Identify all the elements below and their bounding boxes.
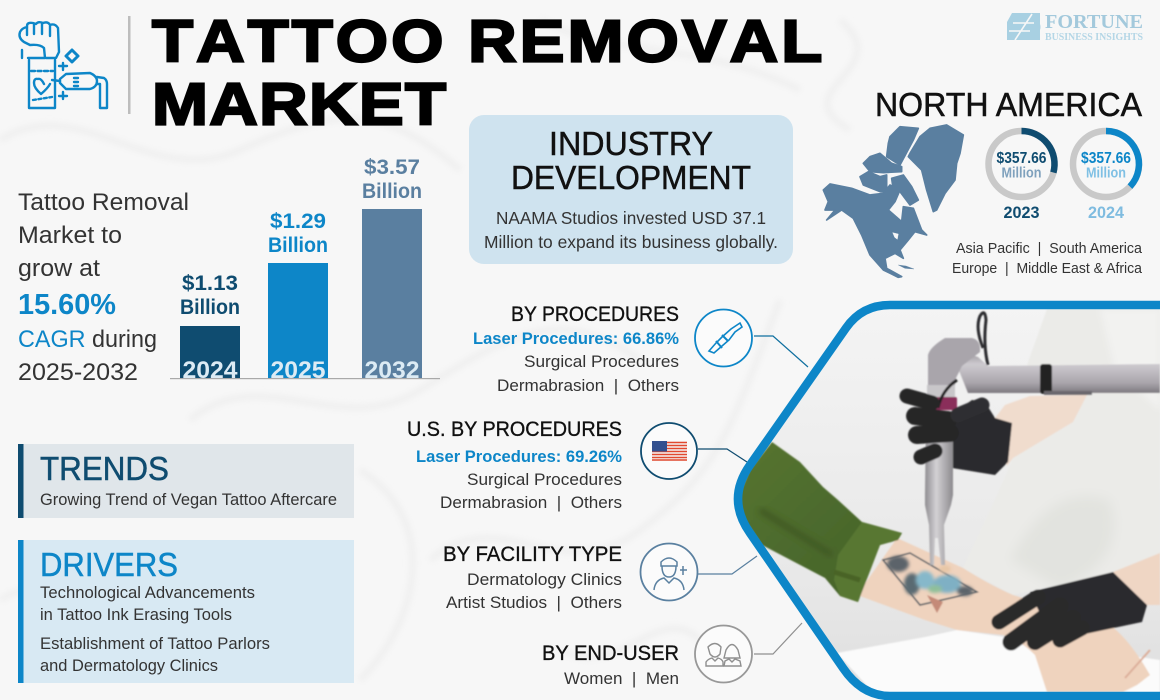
text: other regions xyxy=(952,240,1143,277)
panel: drivers: Establishment of Tattoo Parlors xyxy=(40,635,270,653)
segment: by end-user xyxy=(542,642,679,688)
segment: U.S. by procedures: U.S. BY PROCEDURES xyxy=(407,418,622,441)
segment: U.S. by procedures: Laser Procedures: 69.26% xyxy=(416,447,622,466)
panel: industry development xyxy=(469,115,793,264)
logo: Fortune Business Insights xyxy=(1007,11,1143,43)
bar 2025: $1.29 xyxy=(270,209,326,233)
segment: by procedures: Surgical Procedures xyxy=(524,352,679,371)
segment: by facility type: Dermatology Clinics xyxy=(467,570,622,589)
CAGR text block xyxy=(18,189,189,386)
bar 2032 xyxy=(362,155,422,384)
forearm and hand xyxy=(857,538,1150,692)
panel: drivers: and Dermatology Clinics xyxy=(40,657,218,675)
CAGR text block: 2025-2032 xyxy=(18,359,138,386)
CAGR text block: Market to xyxy=(18,222,122,249)
laser arm xyxy=(927,338,1160,410)
hexagon frame xyxy=(738,305,1160,696)
bar 2024 xyxy=(180,271,240,384)
bar 2032: $3.57 xyxy=(364,155,420,179)
donut: 2024: $357.66 xyxy=(1081,150,1131,167)
logo: Fortune Business Insights: BUSINESS INSIGHTS xyxy=(1045,32,1143,43)
CAGR text block: 15.60% xyxy=(18,289,116,321)
icon: laser handpiece with connector xyxy=(695,310,808,367)
panel: drivers xyxy=(18,540,354,683)
segment: by procedures xyxy=(473,303,679,395)
panel: industry development: INDUSTRY xyxy=(549,125,713,162)
CAGR text block: CAGR during xyxy=(18,326,157,353)
white sheet xyxy=(837,630,1160,700)
panel: trends: Growing Trend of Vegan Tattoo Aftercare xyxy=(40,491,337,509)
heading: North America: NORTH AMERICA xyxy=(875,86,1142,123)
bar 2025: 2025 xyxy=(270,357,326,384)
title: MARKET xyxy=(152,72,446,138)
segment: by end-user: Women | Men xyxy=(564,669,679,688)
lower glove xyxy=(999,572,1147,642)
donut: 2023 xyxy=(988,131,1055,222)
bar 2024: $1.13 xyxy=(182,271,238,295)
donut: 2023: 2023 xyxy=(1004,203,1040,222)
panel: drivers: Technological Advancements xyxy=(40,584,255,602)
segment: by facility type xyxy=(443,543,622,612)
donut: 2024: Million xyxy=(1086,166,1126,182)
donut: 2023: $357.66 xyxy=(996,150,1047,167)
text: other regions: Asia Pacific | South America xyxy=(956,240,1143,257)
bar 2024: Billion xyxy=(180,295,240,319)
icon: tattoo removal arm and laser xyxy=(20,22,107,108)
panel: industry development: NAAMA Studios invested USD 37.1 xyxy=(496,208,766,228)
segment: by procedures: Dermabrasion | Others xyxy=(497,376,679,395)
icon: women and men with connector xyxy=(695,623,802,682)
segment: U.S. by procedures: Dermabrasion | Others xyxy=(440,493,622,512)
donut: 2023: Million xyxy=(1002,166,1042,182)
glove back xyxy=(952,400,1012,475)
segment: by end-user: BY END-USER xyxy=(542,642,679,665)
panel: industry development: Million to expand its business globally. xyxy=(484,232,778,252)
panel: industry development: DEVELOPMENT xyxy=(511,159,751,196)
map: North America xyxy=(823,125,963,277)
panel: drivers: DRIVERS xyxy=(40,546,178,583)
therapist arm xyxy=(995,395,1087,466)
bar 2032: 2032 xyxy=(364,357,420,384)
bar 2032: Billion xyxy=(362,179,422,203)
icon: technician with connector xyxy=(640,544,757,600)
garment xyxy=(1018,310,1160,593)
icon: US flag with connector xyxy=(641,423,747,479)
segment: U.S. by procedures xyxy=(407,418,622,512)
glove fingers xyxy=(907,396,982,457)
panel: drivers: in Tattoo Ink Erasing Tools xyxy=(40,606,232,624)
segment: by procedures: Laser Procedures: 66.86% xyxy=(473,329,679,348)
green sleeve xyxy=(738,442,902,602)
cord xyxy=(978,313,988,365)
title xyxy=(152,9,822,138)
tattoo xyxy=(883,553,977,613)
CAGR text block: Tattoo Removal xyxy=(18,189,189,216)
bar 2024: 2024 xyxy=(182,357,238,384)
donut: 2024 xyxy=(1073,131,1139,222)
segment: by facility type: Artist Studios | Others xyxy=(446,593,622,612)
bar 2025: Billion xyxy=(268,233,328,257)
panel: trends xyxy=(18,444,354,518)
panel: trends: TRENDS xyxy=(40,450,169,487)
donut: 2024: 2024 xyxy=(1088,203,1125,222)
segment: by procedures: BY PROCEDURES xyxy=(511,303,679,326)
title: TATTOO REMOVAL xyxy=(152,9,822,75)
segment: U.S. by procedures: Surgical Procedures xyxy=(467,470,622,489)
text: other regions: Europe | Middle East & Africa xyxy=(952,260,1143,277)
bar chart: market size xyxy=(170,155,440,384)
logo: Fortune Business Insights: FORTUNE xyxy=(1045,11,1143,33)
segment: by facility type: BY FACILITY TYPE xyxy=(443,543,622,566)
bar 2025 xyxy=(268,209,328,384)
CAGR text block: grow at xyxy=(18,255,100,282)
laser handle xyxy=(925,418,953,565)
photo: laser tattoo removal xyxy=(730,300,1160,700)
